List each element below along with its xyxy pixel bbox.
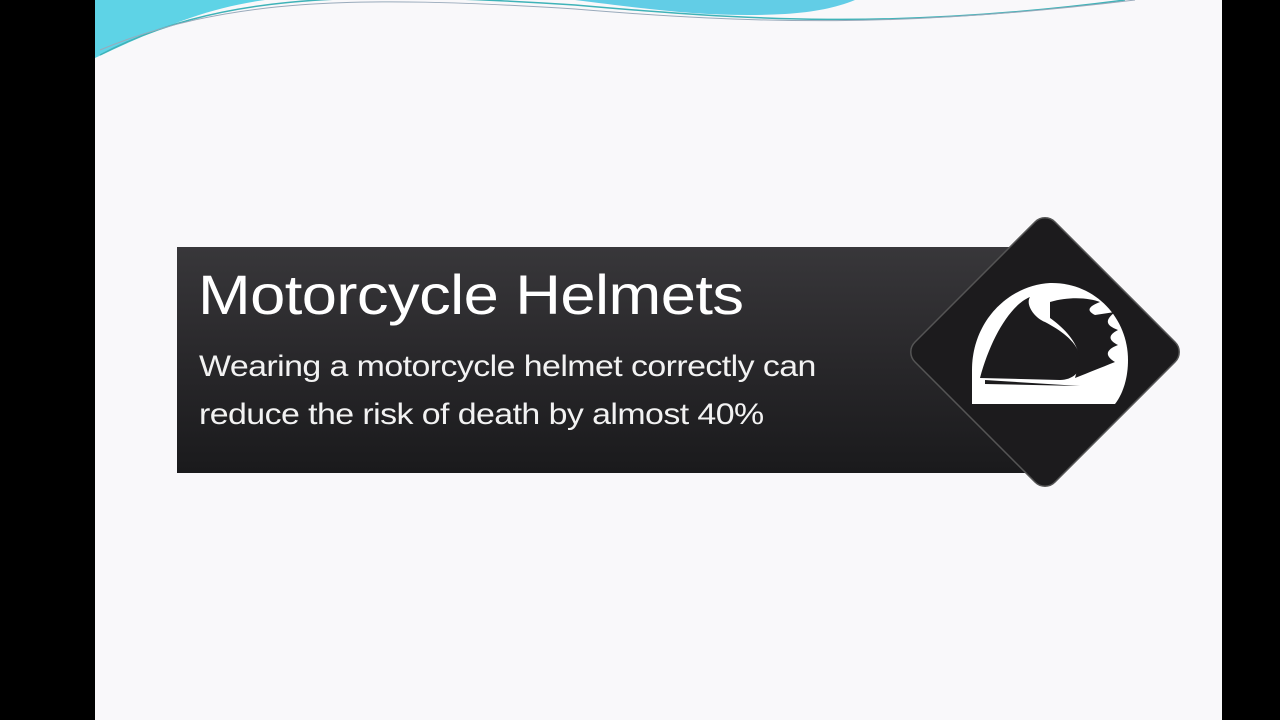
body text: reduce the risk of death by almost 40%	[199, 398, 764, 431]
banner background	[177, 247, 1027, 473]
title: Motorcycle Helmets	[198, 263, 743, 326]
body text	[199, 350, 816, 431]
icon: helmet diamond	[910, 217, 1180, 487]
decorative wave header	[95, 0, 1135, 58]
body text: Wearing a motorcycle helmet correctly can	[199, 350, 816, 383]
